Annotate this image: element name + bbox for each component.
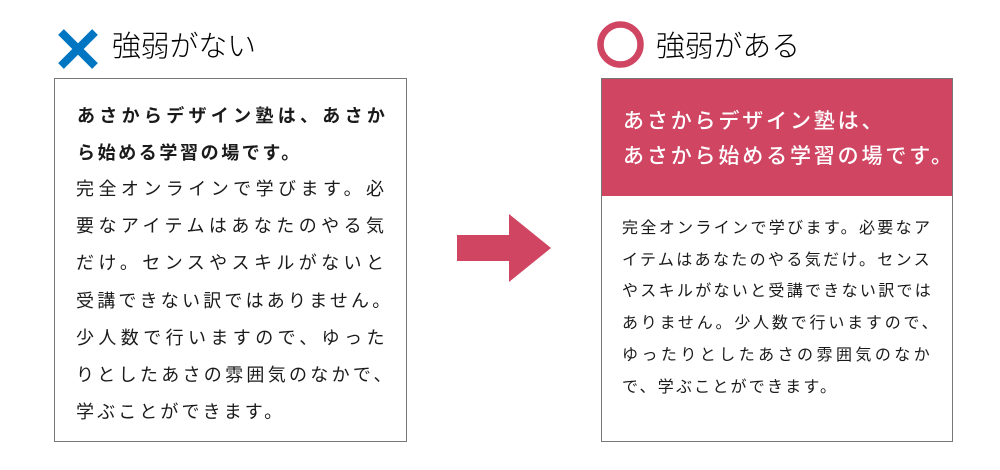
heading: without emphasis: 強弱がない bbox=[112, 31, 256, 63]
body text: ゆったりとしたあさの雰囲気のなか bbox=[622, 347, 933, 364]
body text: 少人数で行いますので、ゆった bbox=[76, 328, 389, 348]
banner text bbox=[623, 110, 955, 168]
panel: without emphasis bbox=[54, 78, 407, 442]
body text: ありません。少人数で行いますので、 bbox=[622, 315, 940, 332]
body text: りとしたあさの雰囲気のなかで、 bbox=[76, 365, 395, 385]
body text bbox=[622, 219, 940, 396]
heading: with emphasis: 強弱がある bbox=[656, 31, 800, 63]
lead text: あさからデザイン塾は、あさか bbox=[77, 106, 389, 126]
body text: 完全オンラインで学びます。必要なア bbox=[622, 220, 932, 237]
body text: だけ。センスやスキルがないと bbox=[76, 253, 388, 273]
body text: 要なアイテムはあなたのやる気 bbox=[76, 216, 388, 236]
body text: イテムはあなたのやる気だけ。センス bbox=[622, 252, 932, 269]
body text: 学ぶことができます。 bbox=[76, 402, 285, 422]
body text: 完全オンラインで学びます。必 bbox=[76, 179, 388, 199]
arrow bbox=[457, 214, 551, 282]
body text: で、学ぶことができます。 bbox=[622, 379, 838, 396]
icon: red circle bbox=[597, 21, 644, 68]
lead text bbox=[77, 106, 389, 163]
body text: 受講できない訳ではありません。 bbox=[76, 291, 393, 311]
emphasized banner bbox=[602, 79, 952, 196]
icon: blue cross bbox=[58, 29, 98, 69]
banner text: あさから始める学習の場です。 bbox=[623, 145, 955, 168]
banner text: あさからデザイン塾は、 bbox=[623, 110, 885, 133]
lead text: ら始める学習の場です。 bbox=[77, 143, 302, 163]
body text bbox=[76, 179, 395, 422]
panel: with emphasis bbox=[601, 78, 953, 442]
body text: やスキルがないと受講できない訳では bbox=[622, 283, 933, 300]
